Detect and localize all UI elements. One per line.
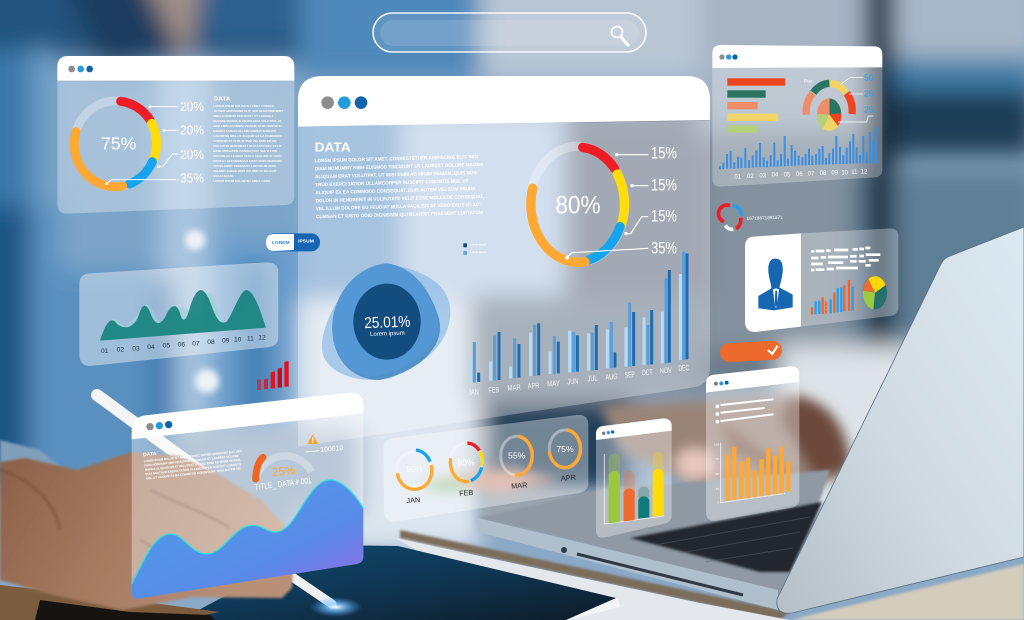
text block: DATA: DOLORE MAGNA ALIQUAM ERAT VOLUTPAT. UT — [213, 119, 282, 123]
window controls — [602, 430, 614, 435]
lorem ipsum paragraph: TRUD EXERCI TATION ULLAMCORPER SUSCIPIT LOBORTIS NISL UT — [315, 178, 469, 188]
month labels: SEP — [625, 370, 635, 380]
gauge caption: TITLE_ DATA # 001 — [254, 475, 312, 492]
laptop slot — [577, 554, 743, 595]
window controls — [146, 421, 172, 430]
toggle: lorem ipsum: LOREM — [272, 240, 290, 246]
icon: businessman — [758, 259, 793, 310]
bar chart: monthly values — [470, 252, 687, 383]
mini bar chart — [812, 280, 856, 315]
panel: main data window — [298, 76, 710, 447]
axis labels: 01 — [734, 175, 742, 181]
window header — [706, 366, 799, 393]
axis labels: 02 — [117, 347, 124, 354]
panel: hand-side area chart window — [132, 393, 363, 599]
area chart: light series — [100, 292, 266, 340]
month labels: JUL — [587, 374, 598, 383]
photo: stylus glare — [310, 597, 362, 617]
donut leader lines and percentages: 15% — [651, 144, 677, 163]
photo: laptop base — [478, 470, 830, 610]
text block: DATA: DATA — [143, 451, 157, 458]
month labels: AUG — [605, 372, 618, 382]
panel: rounded column chart window — [596, 418, 672, 538]
area chart: dark series — [100, 290, 266, 341]
text block: DATA: DATA — [214, 97, 230, 103]
text block: DATA: QUIS NOSTRUD EXERCI TATION ULLAMCORPER SUSCIPIT LOBORTIS — [145, 462, 242, 476]
axis labels: 12 — [861, 170, 868, 176]
month labels: MAR — [507, 383, 521, 393]
photo: white paper — [395, 538, 790, 620]
text block: DATA: LOREM IPSUM DOLOR SIT AMET, CONSECTETUER ADIPISCING ELIT, SED — [144, 449, 243, 463]
month labels: JUN — [567, 377, 579, 386]
text block: DATA: LOREM IPSUM DOLOR SIT AMET, CONSEC- — [213, 104, 275, 108]
donut: JAN 50%: JAN — [406, 495, 421, 505]
bullet list — [715, 399, 773, 423]
donut: FEB 80%: FEB — [459, 488, 474, 498]
text block: DATA: NULLA FACILISI. — [213, 174, 234, 178]
donut leader lines and percentages: 15% — [651, 175, 677, 194]
icon: red signal bars — [257, 361, 289, 390]
axis labels — [734, 170, 868, 181]
axis labels: 09 — [831, 171, 839, 177]
axis labels: 05 — [163, 343, 170, 350]
leader lines and percentages — [105, 100, 204, 186]
window controls — [68, 66, 93, 72]
horizontal bars — [727, 78, 785, 133]
text block: DATA: MAGNA ALIQUAM ERAT VOLUTPAT. UT WISI ENIM AD MINIM VENIAM, — [145, 458, 241, 472]
orange bars — [728, 446, 788, 501]
bar chart: daily values — [720, 127, 876, 169]
photo: tablet — [180, 545, 620, 620]
blob KPI: 25.01%: 25.01% — [364, 314, 411, 332]
text block: DATA: EXERCI TATION ULLAMCORPER SUSCIPIT — [213, 129, 277, 133]
text block: DATA: LOREM IPSUM DOLOR SIT AMET, CONS — [213, 179, 270, 183]
axis labels: 12 — [258, 334, 266, 341]
panel: teal area chart — [79, 233, 320, 390]
donut leader lines and percentages — [565, 144, 677, 260]
text block: DATA: DIAM NONUMMY NIBH EUISMOD TINCIDUNT UT LAOREET DOLORE — [144, 454, 239, 468]
donut: FEB 80%: 80% — [457, 457, 475, 467]
axis labels: 10 — [234, 337, 242, 344]
leader lines and percentages: 20% — [180, 123, 204, 137]
axis labels: 02 — [747, 174, 754, 180]
text lines placeholder — [811, 247, 880, 271]
photo: sleeve — [0, 440, 62, 468]
lorem ipsum paragraph: DIAM NONUMMY NIBH EUISMOD TINCIDUNT UT LAOREET DOLORE MAGNA — [315, 162, 484, 172]
axis labels: 01 — [101, 348, 109, 355]
panel: top-right bars and gauge window — [712, 45, 898, 332]
toggle: lorem ipsum: IPSUM — [298, 239, 314, 245]
donut: MAR 55%: 55% — [508, 451, 526, 461]
axis — [604, 454, 664, 524]
legend: Lorem ipsum — [470, 243, 487, 247]
lorem ipsum paragraph: ALIQUAM ERAT VOLUTPAT. UT WISI ENIM AD MINIM VENIAM, QUIS NOS- — [315, 170, 479, 180]
axis and values: 25 — [716, 487, 719, 491]
axis labels: 04 — [772, 173, 779, 179]
text block: DATA: NIBH EUISMOD TINCIDUNT UT LAOREET — [213, 114, 274, 118]
month labels: DEC — [678, 363, 690, 373]
pie chart — [817, 98, 842, 131]
month labels: JAN — [468, 387, 479, 397]
lorem ipsum paragraph — [315, 154, 485, 220]
window controls — [321, 96, 367, 109]
leader lines and percentages: 20% — [180, 148, 204, 162]
window header — [132, 393, 363, 439]
lorem ipsum paragraph: LOREM IPSUM DOLOR SIT AMET, CONSECTETUER ADIPISCING ELIT, SED — [315, 154, 478, 164]
donut: MAR 55%: MAR — [511, 480, 528, 491]
window controls — [714, 381, 729, 386]
donut: APR 75% — [549, 430, 581, 483]
text block: DATA: LOBORTIS NISL UT ALIQUIP EX EA COMMODO — [213, 134, 283, 138]
month labels: OCT — [641, 368, 653, 377]
axis and values: 100 — [714, 442, 719, 446]
photo: stylus upper — [97, 395, 240, 500]
pie chart — [863, 276, 887, 309]
axis and values: 75 — [716, 457, 719, 461]
lorem ipsum paragraph: CUMSAN ET IUSTO ODIO DIGNISSIM QUI BLANDIT PRAESENT LUPTATUM — [316, 210, 483, 220]
axis labels: 08 — [820, 171, 827, 177]
photo: wood desk strip — [400, 530, 790, 620]
lorem ipsum paragraph: VEL ILLUM DOLORE EU FEUGIAT NULLA FACILISIS AT VERO EROS ET AC- — [316, 202, 481, 212]
axis labels: 03 — [759, 173, 767, 179]
donut centre value: 75% — [101, 133, 136, 153]
donut: APR 75%: 75% — [556, 444, 574, 454]
profile white side — [745, 233, 801, 332]
axis labels: 04 — [147, 344, 155, 351]
month labels — [468, 363, 690, 397]
text block: DATA: CONSEQUAT. DUIS AUTEM VEL EUM IRIURE — [213, 139, 277, 143]
leader lines and percentages: 35% — [180, 172, 204, 186]
axis labels: 07 — [808, 171, 815, 177]
photo: stylus lower — [285, 572, 332, 604]
gauge labels and leaders: 50 — [864, 73, 874, 83]
keyboard — [630, 502, 822, 572]
panel: profile card — [745, 228, 898, 332]
small red and blue ring — [718, 205, 741, 229]
text block: DATA — [213, 97, 283, 183]
axis labels: 11 — [851, 170, 858, 176]
text block: DATA: TETUER ADIPISCING ELIT, SED DIAM NONUMMY — [213, 109, 283, 113]
axis and values: 0 — [717, 501, 719, 505]
text block: DATA: DOLOR IN HENDRERIT IN VULPUTATE VELIT — [213, 144, 282, 148]
rounded columns — [609, 452, 664, 523]
window header — [298, 76, 710, 127]
donut centre value: 80% — [555, 191, 601, 219]
icon: magnifier — [612, 26, 628, 45]
axis labels: 06 — [796, 172, 803, 178]
axis labels: 11 — [247, 335, 254, 342]
laptop port — [561, 547, 567, 553]
search bar — [373, 13, 646, 52]
text block: DATA: NISL UT ALIQUIP EX EA COMMODO CONSEQUAT. DUIS AUTEM VEL — [145, 466, 242, 481]
area chart top edge — [132, 480, 363, 584]
blob KPI: 25.01% — [322, 263, 450, 380]
window header — [712, 45, 882, 68]
donut chart: 75% — [74, 101, 157, 187]
donut chart: 80% — [530, 146, 625, 262]
panel: orange bar chart window — [706, 366, 799, 521]
gauge value — [305, 445, 344, 454]
gauge labels and leaders: 25 — [864, 89, 874, 99]
keyboard key rows — [655, 517, 810, 562]
gauge labels and leaders: Plus — [804, 79, 812, 84]
axis labels: 10 — [841, 170, 849, 176]
axis labels: 05 — [784, 172, 791, 178]
text block: DATA: WISI ENIM AD MINIM VENIAM, QUIS NOSTRUD — [213, 124, 282, 128]
donut leader lines and percentages: 35% — [651, 238, 677, 257]
photo: laptop lid — [777, 227, 1024, 613]
heading: DATA: DATA — [315, 140, 351, 155]
text block: DATA: DOLORE EU FEUGIAT NULLA FACILISIS AT VERO — [213, 154, 282, 158]
ring caption: 16718871891871 — [747, 215, 783, 221]
donut: APR 75%: APR — [560, 473, 576, 483]
photo: desk corner — [790, 564, 1024, 620]
axis labels — [101, 334, 266, 355]
axis labels: 03 — [132, 345, 140, 352]
laptop front face — [478, 518, 778, 610]
leader lines and percentages: 20% — [180, 100, 204, 114]
donut leader lines and percentages: 15% — [651, 207, 677, 226]
donut: JAN 50%: 50% — [406, 465, 422, 474]
panel: monthly donut strip — [383, 366, 799, 538]
icon: warning triangle — [307, 434, 318, 444]
axis and values: 50 — [716, 472, 719, 476]
gauge: 25%: 25% — [271, 464, 296, 479]
window controls — [719, 54, 738, 60]
axis labels: 06 — [178, 341, 185, 348]
panel: 75% donut window — [57, 56, 294, 214]
text block: DATA — [143, 442, 244, 481]
month labels: APR — [527, 381, 540, 391]
area chart: gradient wave — [132, 480, 363, 599]
semi-circle gauge — [806, 83, 852, 115]
photo: table under hand — [0, 585, 220, 620]
month labels: FEB — [488, 385, 499, 395]
month labels: MAY — [547, 379, 561, 388]
gauge labels and leaders: 25 — [864, 105, 874, 115]
text block: DATA: ESSE MOLESTIE CONSEQUAT, VEL ILLUM — [213, 149, 277, 153]
text block: DATA: QUI BLANDIT PRAESENT LUPTATUM ZZRIL — [213, 164, 277, 168]
axis labels: 08 — [207, 339, 215, 346]
lorem ipsum paragraph: DOLOR IN HENDRERIT IN VULPUTATE VELIT ESSE MOLESTIE CONSEQUAT, — [316, 194, 485, 204]
donut: MAR 55% — [501, 436, 532, 491]
text block: DATA: DELENIT AUGUE DUIS DOLORE TE FEUGAIT — [213, 169, 277, 173]
axis labels: 09 — [222, 338, 230, 345]
blob KPI: 25.01%: Lorem ipsum — [370, 331, 405, 338]
lorem ipsum paragraph: ALIQUIP EX EA COMMODO CONSEQUAT. DUIS AUTEM VEL EUM IRIURE — [315, 186, 476, 196]
photo: writing hand — [0, 452, 293, 620]
donut: JAN 50% — [397, 450, 432, 505]
gauge: 25% — [256, 456, 312, 479]
text block: DATA: EROS ET ACCUMSAN ET IUSTO ODIO DIGNISSIM — [213, 159, 282, 163]
axis labels: 07 — [192, 340, 200, 347]
legend — [463, 243, 487, 255]
gauge labels and leaders — [804, 73, 874, 122]
month labels: NOV — [660, 366, 673, 375]
donut: FEB 80% — [450, 443, 482, 498]
window header — [596, 418, 672, 440]
toggle: orange check pill — [720, 340, 782, 363]
toggle: lorem ipsum — [266, 233, 320, 251]
gauge value: 100010 — [320, 445, 344, 454]
axis and values — [714, 442, 785, 505]
legend: Lorem ipsum — [470, 250, 487, 254]
window header — [57, 56, 294, 81]
